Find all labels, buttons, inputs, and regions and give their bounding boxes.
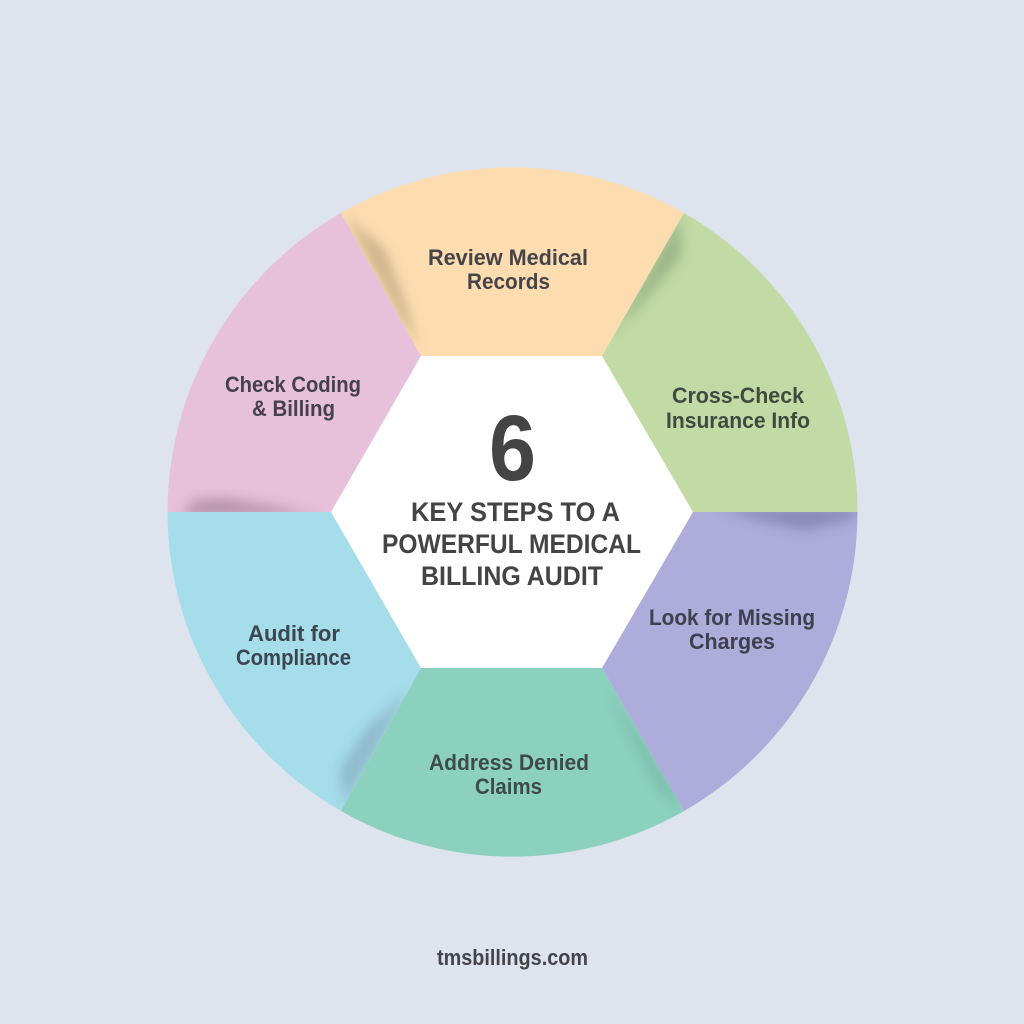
- segment: look for missing charges: [602, 508, 860, 811]
- center title: KEY STEPS TO A: [411, 497, 620, 527]
- segment: check coding and billing: [168, 213, 421, 516]
- segment: cross-check insurance info: Insurance Info: [666, 408, 810, 433]
- segment: check coding and billing: Check Coding: [225, 372, 361, 397]
- segment: audit for compliance: [168, 512, 421, 811]
- center title: BILLING AUDIT: [421, 561, 603, 591]
- segment: audit for compliance: Audit for: [248, 621, 340, 646]
- segment: check coding and billing: & Billing: [252, 396, 335, 421]
- segment: look for missing charges: Look for Missing: [649, 605, 815, 630]
- segment: cross-check insurance info: [602, 213, 858, 512]
- segment: address denied claims: [341, 668, 684, 857]
- segment: address denied claims: Claims: [475, 774, 542, 799]
- segment: review medical records: Review Medical: [428, 245, 588, 270]
- big number 6: 6: [489, 396, 536, 500]
- segment: cross-check insurance info: Cross-Check: [672, 383, 805, 408]
- center title: [382, 497, 641, 591]
- segment: review medical records: Records: [467, 269, 550, 294]
- segment: look for missing charges: Charges: [689, 629, 775, 654]
- center hexagon: [331, 356, 693, 668]
- center title: POWERFUL MEDICAL: [382, 529, 641, 559]
- segment: review medical records: [341, 167, 684, 356]
- footer website: tmsbillings.com: [437, 945, 588, 970]
- circular diagram: [168, 167, 860, 857]
- segment: audit for compliance: Compliance: [236, 645, 351, 670]
- segment: address denied claims: Address Denied: [429, 750, 589, 775]
